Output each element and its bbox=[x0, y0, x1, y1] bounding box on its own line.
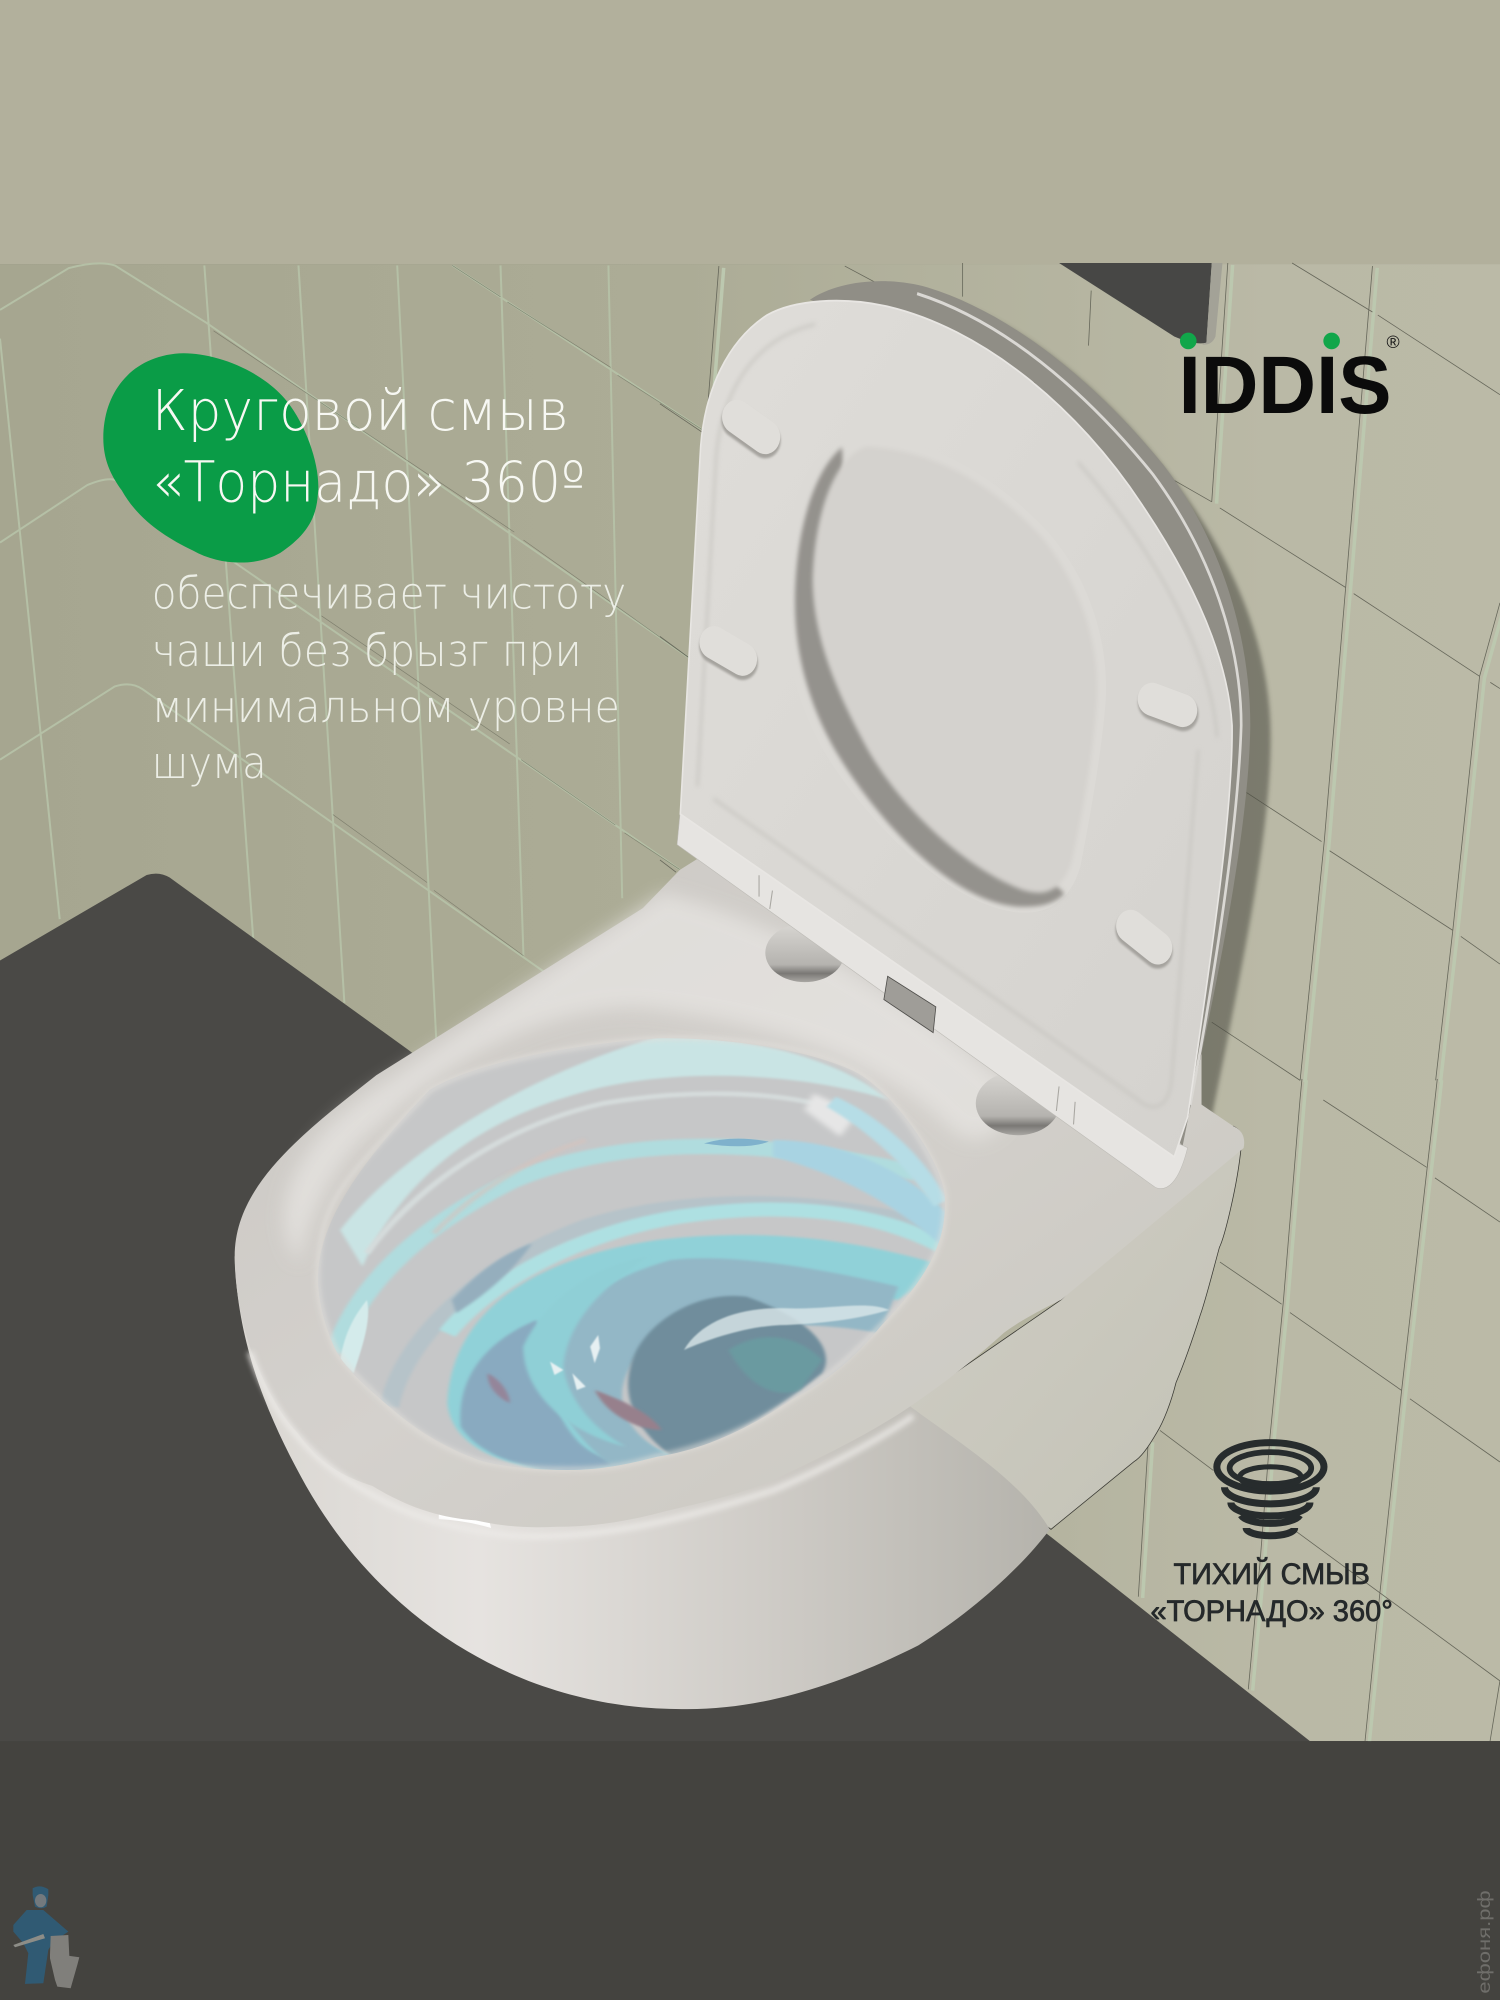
seat opening rim bbox=[784, 438, 1106, 913]
top band bbox=[0, 0, 1500, 264]
seat and lid bbox=[677, 281, 1250, 1189]
toilet bbox=[235, 281, 1271, 1709]
description text: шума bbox=[152, 739, 267, 789]
lid shadow on wall bbox=[939, 297, 1271, 1117]
back of bowl reflecting wall bbox=[893, 1126, 1243, 1529]
bowl body bbox=[235, 1256, 1050, 1709]
main aqua swirl bbox=[447, 1235, 947, 1473]
IDDIS logo: IDDIS bbox=[1179, 340, 1392, 431]
plumber mascot bbox=[13, 1886, 79, 1988]
dark vortex centre bbox=[628, 1296, 826, 1455]
plumber figure bbox=[13, 1886, 68, 1984]
main heading: Круговой смыв bbox=[152, 379, 569, 444]
bumper lower right bbox=[1109, 903, 1180, 975]
deck highlight bbox=[284, 893, 1020, 1263]
tiled wall bbox=[0, 264, 1500, 1741]
rim and deck bbox=[235, 816, 1244, 1527]
left wall tile lines bbox=[0, 263, 707, 1039]
feature label: ТИХИЙ СМЫВ bbox=[1173, 1557, 1370, 1591]
right hinge post bbox=[976, 1071, 1060, 1135]
bowl highlight bbox=[439, 1513, 491, 1528]
seat opening surface bbox=[813, 447, 1097, 893]
icon: tornado bbox=[1217, 1443, 1324, 1536]
basin edge shading bbox=[318, 1038, 945, 1469]
plumber wrench bbox=[13, 1934, 45, 1947]
bottom band bbox=[0, 1741, 1500, 2000]
lid face bbox=[680, 301, 1232, 1157]
description text: обеспечивает чистоту bbox=[152, 569, 626, 619]
left hinge post bbox=[765, 923, 844, 982]
feature label: «ТОРНАДО» 360° bbox=[1151, 1595, 1393, 1628]
description text: чаши без брызг при bbox=[152, 627, 582, 677]
plumber face bbox=[35, 1894, 46, 1907]
right wall tile lines bbox=[660, 263, 1500, 1082]
hinge bar bbox=[677, 811, 1188, 1189]
lower right wall tile lines bbox=[1138, 1079, 1500, 1743]
bumper mid left bbox=[693, 620, 764, 686]
flush plate bbox=[1059, 263, 1222, 345]
registered mark: ® bbox=[1386, 332, 1400, 352]
hinge bar joints bbox=[759, 875, 1075, 1124]
main heading: «Торнадо» 360º bbox=[152, 450, 585, 515]
description text bbox=[152, 569, 626, 789]
green blob bbox=[103, 353, 318, 563]
lid grey edge bbox=[810, 281, 1250, 1148]
bumper top left bbox=[715, 393, 788, 465]
reddish reflections bbox=[595, 1390, 662, 1430]
site watermark: ефоня.рф bbox=[1474, 1890, 1494, 1994]
lid white rim bbox=[917, 294, 1241, 1105]
wave crest bbox=[684, 1305, 889, 1350]
pale upper water band bbox=[340, 1037, 889, 1267]
seat opening shadow bbox=[795, 447, 1064, 907]
logo dots bbox=[1180, 333, 1340, 349]
lid inner groove bbox=[697, 324, 1217, 1107]
foam flecks bbox=[550, 1335, 600, 1390]
rim lower edge glow bbox=[250, 1352, 913, 1536]
centre hinge bbox=[884, 976, 936, 1033]
dark counter bbox=[0, 874, 1310, 1741]
bumper mid right bbox=[1133, 678, 1203, 736]
toilet figure bbox=[50, 1935, 79, 1988]
basin with tornado water bbox=[320, 1038, 945, 1470]
description text: минимальном уровне bbox=[152, 683, 620, 733]
main heading bbox=[152, 379, 585, 515]
feature label bbox=[1151, 1557, 1393, 1628]
